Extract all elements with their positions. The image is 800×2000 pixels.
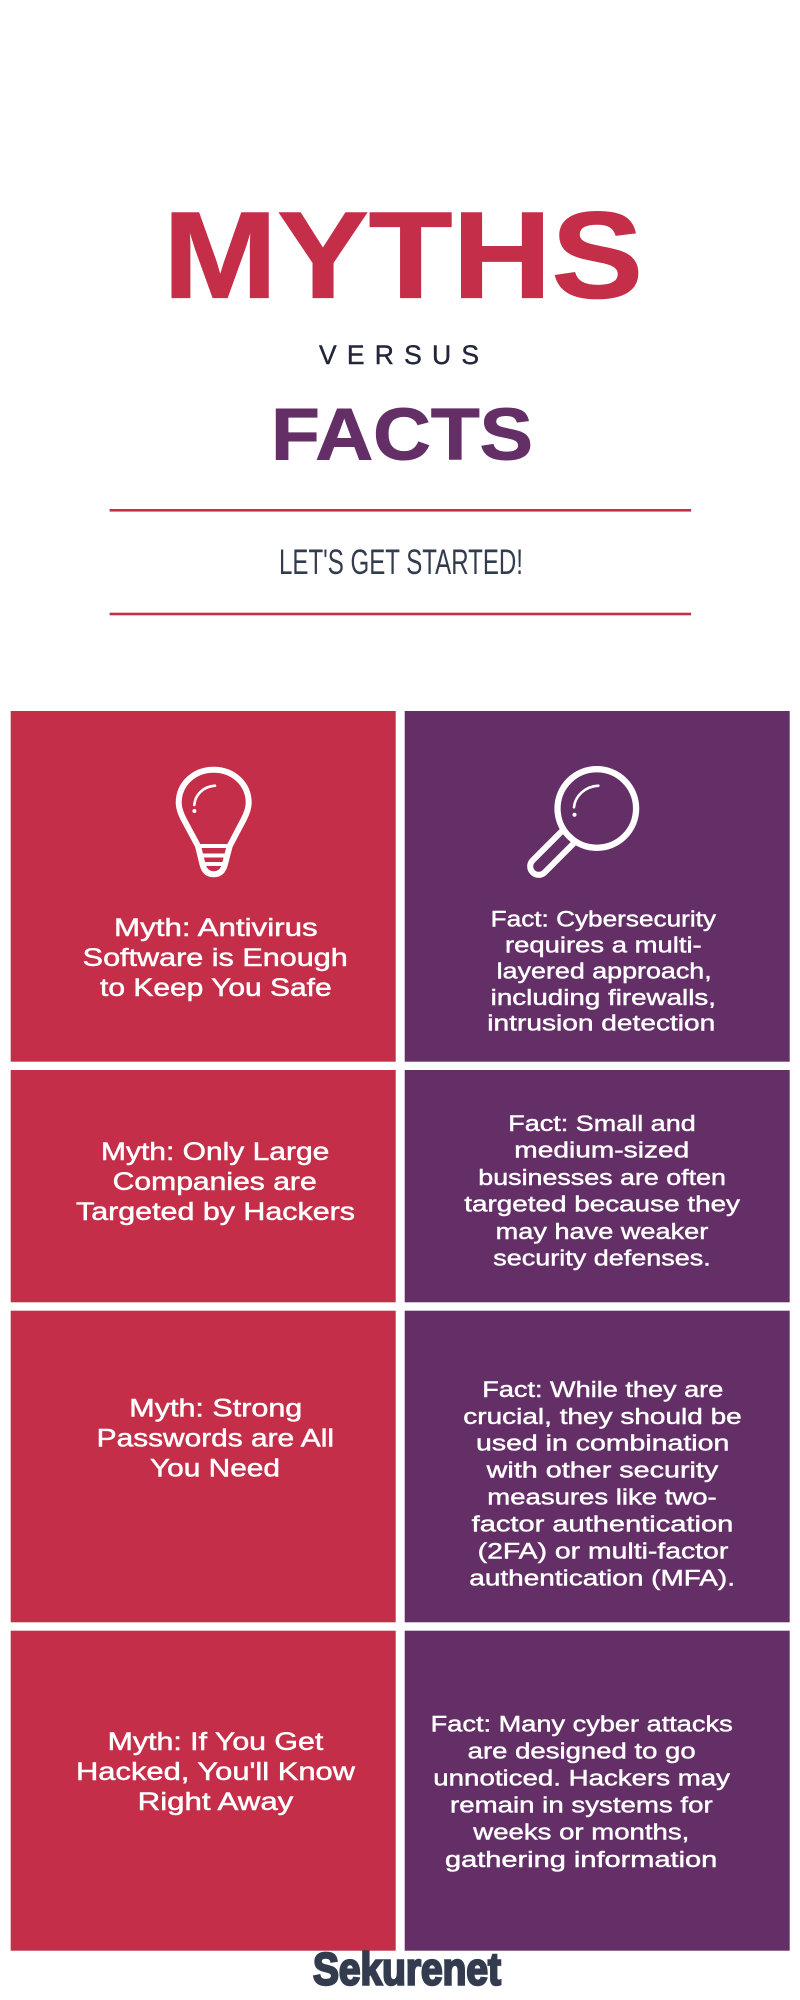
myth text 2: Myth: Only Large	[101, 1138, 329, 1166]
fact text 4: unnoticed. Hackers may	[433, 1766, 730, 1791]
panel: fact 1	[405, 711, 790, 1062]
myth text 1: to Keep You Safe	[100, 974, 332, 1002]
myth text 2: Companies are	[113, 1168, 317, 1196]
fact text 3	[463, 1377, 742, 1590]
fact text 3: (2FA) or multi-factor	[478, 1538, 728, 1563]
fact text 3: Fact: While they are	[482, 1377, 723, 1402]
title: MYTHS: MYTHS	[163, 188, 643, 324]
title: FACTS: FACTS	[271, 394, 533, 476]
myth text 3	[97, 1395, 334, 1483]
brand logo: Sekurenet: Sekurenet	[313, 1944, 501, 1994]
myth text 3: You Need	[150, 1455, 280, 1483]
panel: myth 4	[11, 1631, 396, 1951]
fact text 2	[464, 1111, 740, 1271]
myth text 3: Myth: Strong	[129, 1395, 302, 1423]
fact text 1	[487, 907, 716, 1036]
fact text 2: medium-sized	[514, 1138, 689, 1163]
tagline: LET'S GET STARTED!	[279, 543, 523, 582]
myth text 1	[83, 914, 348, 1002]
panel: fact 3	[405, 1311, 790, 1622]
fact text 4: are designed to go	[468, 1738, 696, 1763]
panel: fact 4	[405, 1631, 790, 1951]
fact text 2: security defenses.	[493, 1246, 711, 1271]
myth text 3: Passwords are All	[97, 1425, 334, 1453]
myth text 4	[76, 1728, 356, 1816]
fact text 4: remain in systems for	[450, 1793, 713, 1818]
fact text 1: layered approach,	[497, 959, 712, 984]
myth text 4: Right Away	[138, 1788, 294, 1816]
myth text 4: Hacked, You'll Know	[76, 1758, 356, 1786]
icon: light bulb	[179, 770, 249, 874]
fact text 1: Fact: Cybersecurity	[491, 907, 716, 932]
fact text 4: weeks or months,	[472, 1819, 689, 1844]
myth text 2: Targeted by Hackers	[76, 1198, 355, 1226]
fact text 2: may have weaker	[496, 1219, 708, 1244]
fact text 1: intrusion detection	[487, 1011, 715, 1036]
panel: fact 2	[405, 1070, 790, 1302]
fact text 2: Fact: Small and	[508, 1111, 696, 1136]
myth text 2	[76, 1138, 355, 1226]
fact text 2: businesses are often	[478, 1165, 726, 1190]
myth text 4: Myth: If You Get	[108, 1728, 323, 1756]
fact text 3: factor authentication	[472, 1512, 733, 1537]
fact text 3: crucial, they should be	[463, 1404, 742, 1429]
panel: myth 2	[11, 1070, 396, 1302]
fact text 1: requires a multi-	[505, 933, 702, 958]
myth text 1: Software is Enough	[83, 944, 348, 972]
subtitle: VERSUS: VERSUS	[319, 340, 479, 370]
fact text 3: used in combination	[476, 1431, 729, 1456]
fact text 4	[431, 1712, 733, 1872]
fact text 3: with other security	[485, 1458, 718, 1483]
fact text 1: including firewalls,	[491, 985, 716, 1010]
fact text 3: measures like two-	[487, 1484, 717, 1509]
fact text 2: targeted because they	[464, 1192, 740, 1217]
fact text 4: Fact: Many cyber attacks	[431, 1712, 733, 1737]
icon: magnifying glass	[530, 769, 636, 875]
panel: myth 1	[11, 711, 396, 1062]
fact text 4: gathering information	[445, 1847, 717, 1872]
panel: myth 3	[11, 1311, 396, 1622]
myth text 1: Myth: Antivirus	[114, 914, 318, 942]
fact text 3: authentication (MFA).	[469, 1565, 735, 1590]
